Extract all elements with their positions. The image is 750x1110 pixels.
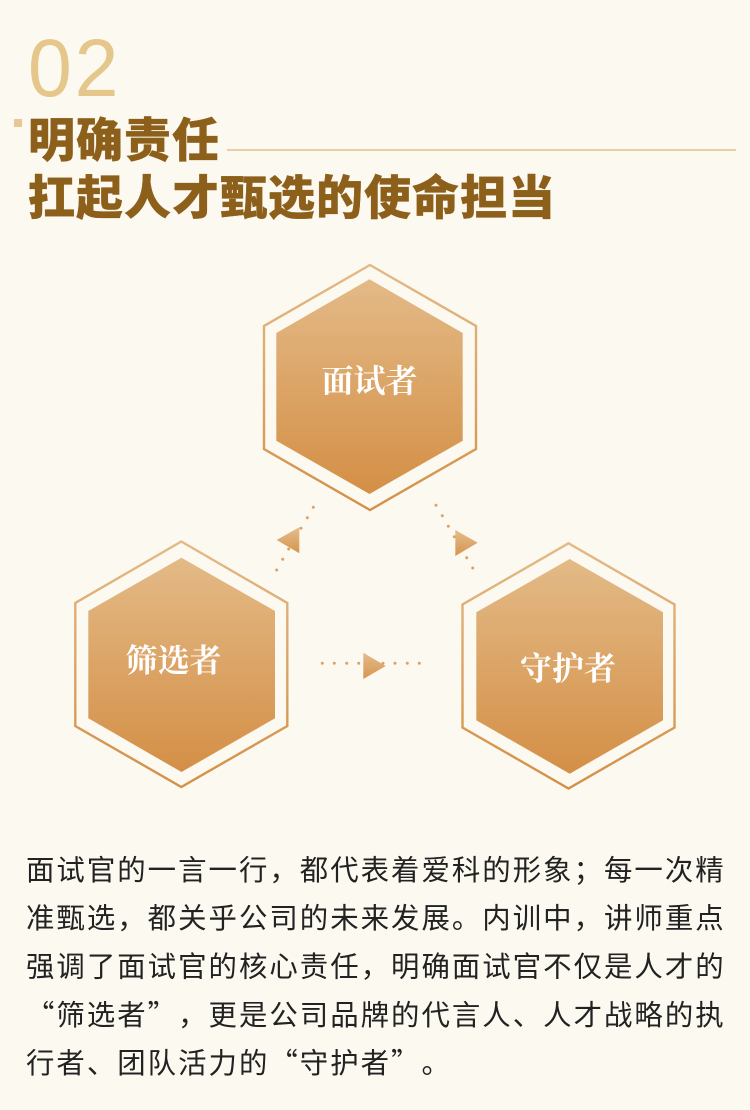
heading: 扛起人才甄选的使命担当: [28, 172, 556, 224]
heading marker square: [14, 119, 22, 127]
body text: 行者、团队活力的“守护者”。: [26, 1041, 452, 1082]
heading: [28, 114, 556, 224]
body text: [26, 848, 726, 1082]
heading: 明确责任: [28, 114, 220, 167]
hexagon: screener: 筛选者: [125, 636, 222, 682]
hexagon: guardian: [462, 543, 674, 788]
arrow: screener to guardian: [321, 653, 421, 679]
hexagon: screener: [75, 542, 287, 787]
heading rule: [227, 149, 736, 151]
body text: “筛选者”，更是公司品牌的代言人、人才战略的执: [26, 993, 726, 1034]
body text: 准甄选，都关乎公司的未来发展。内训中，讲师重点: [26, 896, 726, 937]
body text: 面试官的一言一行，都代表着爱科的形象；每一次精: [26, 848, 726, 889]
section number: 02: [28, 23, 121, 114]
hexagon: interviewer: 面试者: [321, 356, 418, 402]
arrow: screener to interviewer: [275, 506, 315, 572]
arrow: interviewer to guardian: [434, 504, 478, 570]
hexagon: interviewer: [264, 265, 476, 510]
hexagon: guardian: 守护者: [520, 644, 616, 690]
body text: 强调了面试官的核心责任，明确面试官不仅是人才的: [26, 944, 726, 986]
